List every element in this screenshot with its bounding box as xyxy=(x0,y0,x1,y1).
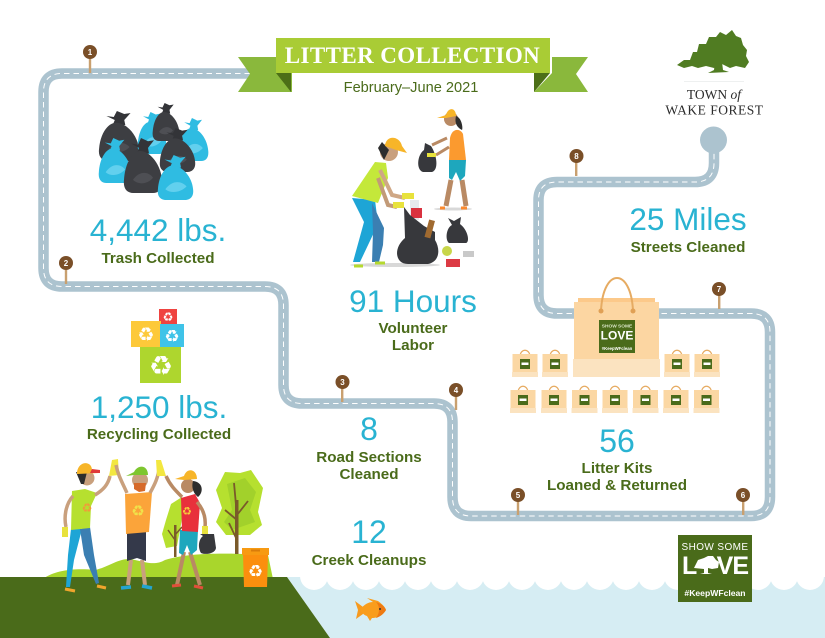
Show Some Love badge: VE xyxy=(717,552,748,580)
stat: recycling xyxy=(87,389,231,443)
title banner xyxy=(238,38,588,92)
recycling bin xyxy=(242,548,269,587)
icon: recycling boxes: ♻ xyxy=(149,351,173,382)
stat: litter kits: 56 xyxy=(599,423,635,459)
stat: creek cleanups xyxy=(312,514,426,569)
stat: trash: 4,442 lbs. xyxy=(90,212,226,248)
stat: road sections xyxy=(316,411,422,483)
stat: streets: 25 Miles xyxy=(629,201,747,237)
icons: small litter kit bags xyxy=(510,350,720,413)
icon: large litter kit bag xyxy=(573,278,660,377)
person: left volunteer: ♻ xyxy=(82,501,92,515)
pins: 8 xyxy=(574,152,579,161)
logo: Town of Wake Forest: TOWN of xyxy=(687,87,743,102)
ground and hills xyxy=(0,554,330,638)
recycling bin: ♻ xyxy=(248,562,263,582)
icon: fish xyxy=(355,598,386,621)
pins: 3 xyxy=(340,378,345,387)
stat: trash: Trash Collected xyxy=(101,250,215,267)
stat: streets xyxy=(629,201,747,256)
water xyxy=(287,562,825,638)
icon: recycling boxes: ♻ xyxy=(137,324,155,346)
person: left volunteer xyxy=(62,459,119,591)
trees xyxy=(162,470,263,557)
Show Some Love badge: #KeepWFclean xyxy=(684,588,746,598)
illustration: volunteers picking litter xyxy=(350,109,474,267)
title banner: LITTER COLLECTION xyxy=(285,43,540,68)
stat: recycling: 1,250 lbs. xyxy=(91,389,227,425)
person: middle volunteer: ♻ xyxy=(131,502,145,520)
person: right volunteer xyxy=(166,470,216,588)
stat: litter kits: Litter Kits xyxy=(582,460,652,477)
stat: volunteer hours xyxy=(349,283,477,354)
logo: Town of Wake Forest: WAKE FOREST xyxy=(665,102,764,118)
pins: 5 xyxy=(516,491,521,500)
date subtitle: February–June 2021 xyxy=(344,80,478,96)
stat: volunteer hours: 91 Hours xyxy=(349,283,477,319)
illustration: volunteers high five xyxy=(62,459,216,591)
stat: road sections: 8 xyxy=(360,411,378,447)
stat: recycling: Recycling Collected xyxy=(87,426,231,443)
stat: litter kits xyxy=(547,423,687,494)
pins: 2 xyxy=(64,259,69,268)
pins xyxy=(59,45,750,515)
icon: recycling boxes: ♻ xyxy=(163,310,173,324)
stat: volunteer hours: Volunteer xyxy=(379,320,448,337)
icon: recycling boxes: ♻ xyxy=(164,327,180,347)
icon: large litter kit bag: #KeepWFclean xyxy=(602,346,633,351)
Show Some Love badge: SHOW SOME xyxy=(682,542,748,553)
stat: streets: Streets Cleaned xyxy=(631,239,745,256)
stat: road sections: Road Sections xyxy=(316,449,422,466)
person: right volunteer: ♻ xyxy=(182,505,192,518)
icon: large litter kit bag: LOVE xyxy=(601,328,633,342)
stat: road sections: Cleaned xyxy=(339,466,399,483)
logo: Town of Wake Forest xyxy=(665,30,764,118)
stat: creek cleanups: Creek Cleanups xyxy=(312,552,426,569)
pins: 7 xyxy=(717,285,722,294)
stat: volunteer hours: Labor xyxy=(392,337,434,354)
pins: 6 xyxy=(741,491,746,500)
person: middle volunteer xyxy=(116,460,166,588)
icon: large litter kit bag: SHOW SOME xyxy=(602,324,633,330)
stat: creek cleanups: 12 xyxy=(351,514,387,550)
pins: 1 xyxy=(88,48,93,57)
Show Some Love badge: L xyxy=(682,552,697,580)
icon: trash bags xyxy=(99,103,208,200)
Show Some Love badge xyxy=(678,535,752,602)
pins: 4 xyxy=(454,386,459,395)
road xyxy=(44,74,770,516)
stat: trash xyxy=(90,212,226,267)
icon: recycling boxes xyxy=(131,309,184,383)
stat: litter kits: Loaned & Returned xyxy=(547,477,687,494)
